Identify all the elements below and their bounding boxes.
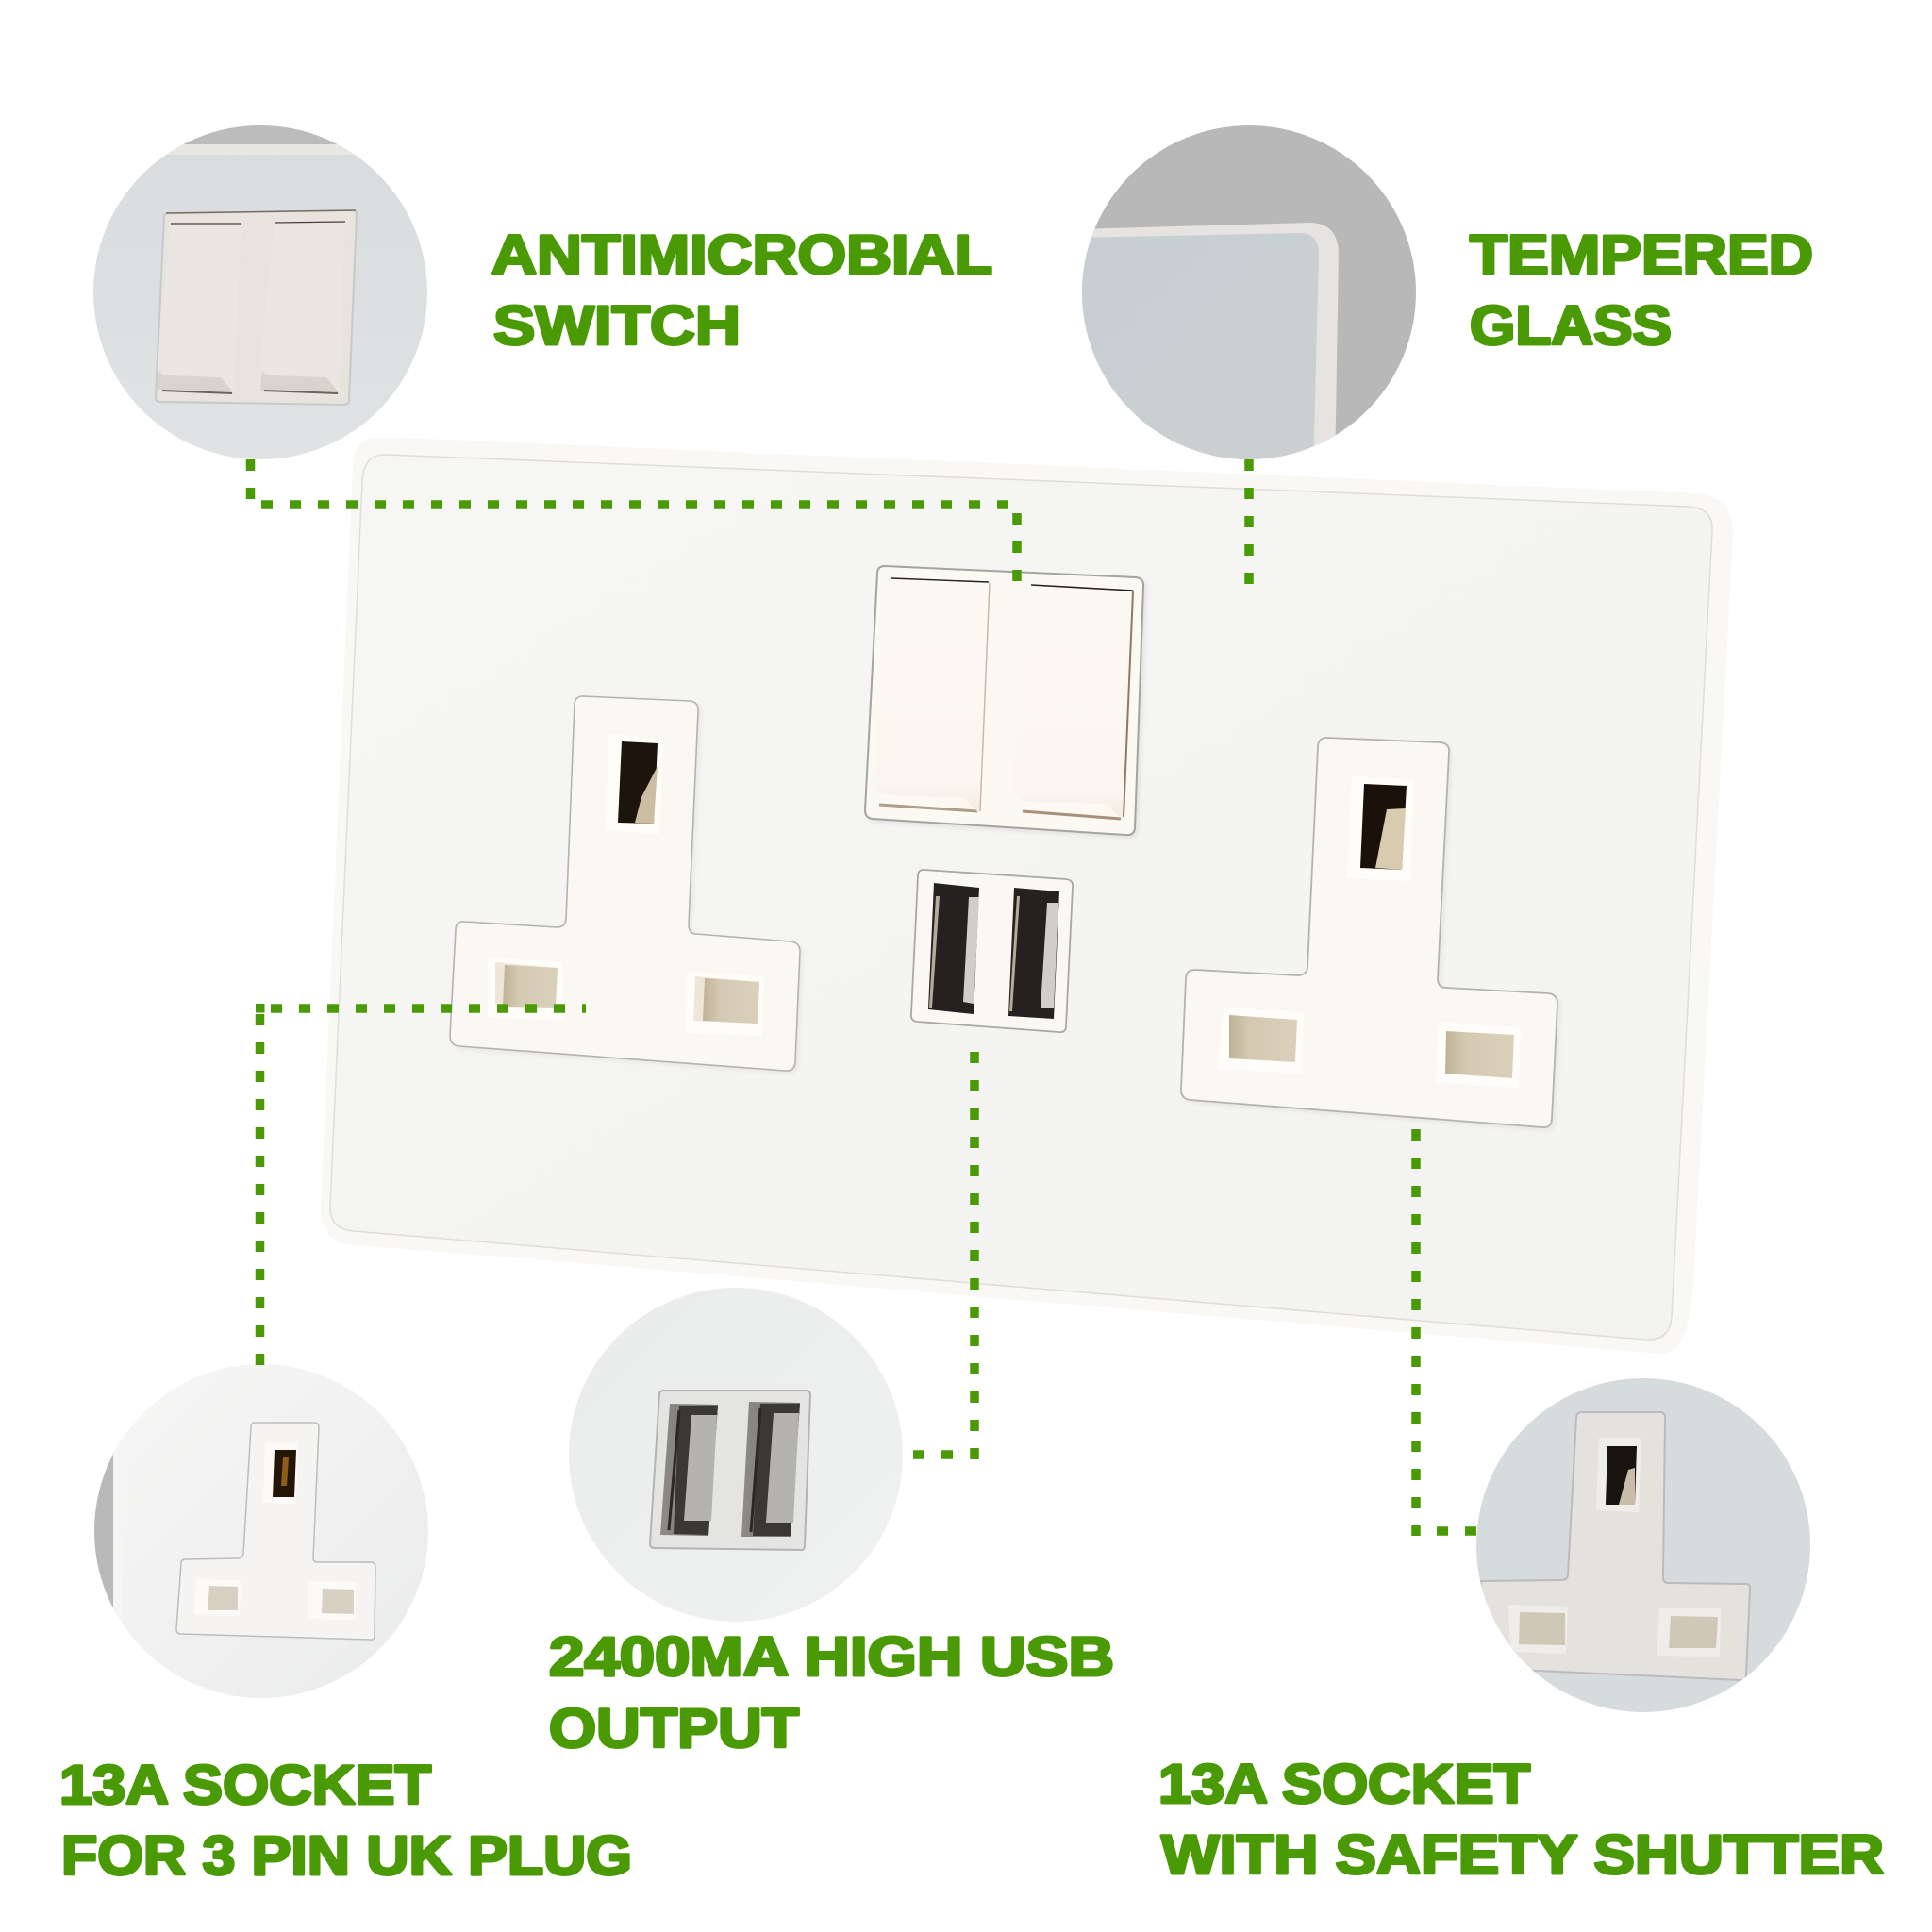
label: antimicrobial switch (491, 225, 992, 357)
label: antimicrobial switch: SWITCH (493, 295, 741, 357)
plate rim (321, 437, 1733, 1354)
label: USB output: OUTPUT (549, 1698, 799, 1759)
USB detail right port (741, 1402, 800, 1537)
connector: right socket (1416, 1129, 1476, 1536)
socket plate (321, 437, 1733, 1354)
main double switch (865, 566, 1146, 838)
label: tempered glass (1470, 225, 1813, 357)
label: tempered glass: GLASS (1470, 295, 1672, 357)
label: 13A socket for 3 pin plug: 13A SOCKET (59, 1755, 431, 1816)
connector: switch (251, 459, 1017, 582)
USB right port (1008, 888, 1059, 1019)
plate glass face (330, 455, 1712, 1340)
circle detail: antimicrobial switch (93, 125, 427, 459)
label: USB output (549, 1626, 1114, 1759)
connector: tempered glass (1244, 459, 1254, 585)
circle detail: tempered glass (1075, 125, 1416, 472)
USB left port (928, 883, 979, 1014)
label: 13A socket with safety shutter: 13A SOCKET (1158, 1754, 1530, 1815)
small left rocker (158, 224, 242, 393)
USB detail left port (660, 1404, 718, 1536)
label: 13A socket for 3 pin plug: FOR 3 PIN UK PLUG (61, 1825, 632, 1887)
label: 13A socket with safety shutter: WITH SAFETY SHUTTER (1161, 1824, 1884, 1886)
left rocker (873, 578, 990, 813)
label: antimicrobial switch: ANTIMICROBIAL (491, 225, 992, 286)
circle detail: socket with safety shutter (1476, 1378, 1810, 1712)
connector: left socket (256, 1004, 586, 1365)
label: 13A socket with safety shutter (1158, 1754, 1884, 1886)
right socket (1181, 738, 1560, 1130)
USB ports (911, 870, 1073, 1032)
right rocker (1012, 585, 1133, 820)
label: tempered glass: TEMPERED (1470, 225, 1813, 286)
label: USB output: 2400MA HIGH USB (549, 1626, 1114, 1688)
label: 13A socket for 3 pin plug (59, 1755, 632, 1887)
small right rocker (260, 222, 345, 393)
connector: USB (913, 1052, 974, 1459)
left socket (450, 696, 803, 1074)
circle detail: 13A socket for 3 pin plug (94, 1364, 428, 1698)
circle detail: USB output (569, 1288, 903, 1622)
